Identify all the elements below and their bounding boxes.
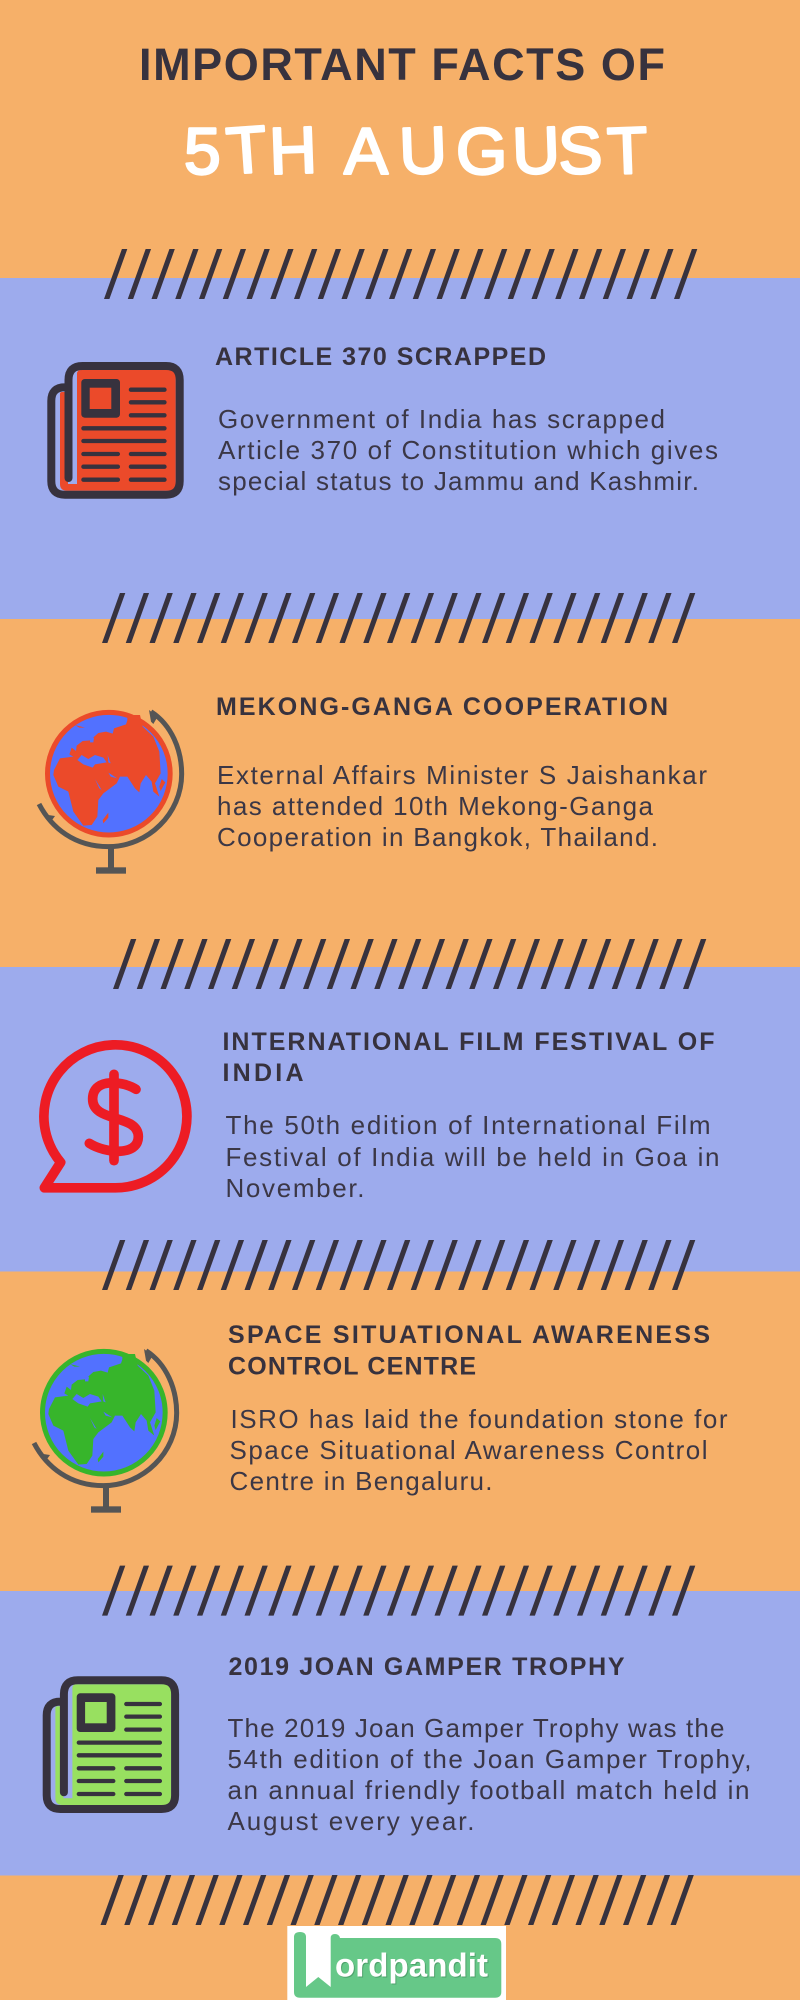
logo text: ordpandit [335, 1947, 488, 1984]
panel: article 370 [0, 278, 800, 619]
heading: 2019 JOAN GAMPER TROPHY [228, 1653, 625, 1681]
heading [228, 1321, 710, 1380]
body text: Government of India has scrapped [218, 404, 665, 434]
body text [226, 1110, 720, 1203]
body text: has attended 10th Mekong-Ganga [217, 791, 654, 821]
heading: SPACE SITUATIONAL AWARENESS [228, 1321, 710, 1349]
logo: wordpandit [287, 1926, 506, 2000]
body text: Centre in Bengaluru. [230, 1466, 492, 1496]
body text: ISRO has laid the foundation stone for [230, 1404, 728, 1434]
body text: The 2019 Joan Gamper Trophy was the [228, 1713, 724, 1743]
panel: film festival [0, 967, 800, 1272]
body text: Festival of India will be held in Goa in [226, 1142, 720, 1172]
icon: globe with green land [34, 1349, 177, 1513]
icon: dollar speech bubble [44, 1045, 187, 1188]
body text [218, 404, 718, 496]
heading: MEKONG-GANGA COOPERATION [216, 693, 668, 721]
body text: Space Situational Awareness Control [230, 1435, 708, 1465]
body text: special status to Jammu and Kashmir. [218, 466, 699, 496]
header [139, 39, 665, 188]
body text [230, 1404, 728, 1496]
icon: globe with red land [39, 710, 182, 874]
body text: November. [226, 1173, 364, 1203]
heading: CONTROL CENTRE [228, 1352, 476, 1380]
panel: space situational awareness [0, 1272, 800, 1591]
body text: 54th edition of the Joan Gamper Trophy, [228, 1744, 752, 1774]
body text: an annual friendly football match held in [228, 1775, 750, 1805]
heading: INTERNATIONAL FILM FESTIVAL OF [222, 1028, 714, 1056]
body text [217, 760, 707, 852]
body text: External Affairs Minister S Jaishankar [217, 760, 707, 790]
body text: August every year. [228, 1806, 474, 1836]
icon: green newspaper [47, 1680, 175, 1809]
title: date: 5TH AUGUST [184, 111, 649, 188]
body text: Article 370 of Constitution which gives [218, 435, 718, 465]
icon: red newspaper [51, 366, 180, 495]
body text: The 50th edition of International Film [226, 1110, 710, 1140]
title: important facts of: IMPORTANT FACTS OF [139, 39, 665, 90]
panel: joan gamper trophy [0, 1591, 800, 1876]
heading: ARTICLE 370 SCRAPPED [215, 343, 546, 371]
heading: INDIA [222, 1059, 304, 1087]
body text [228, 1713, 752, 1836]
body text: Cooperation in Bangkok, Thailand. [217, 822, 658, 852]
panel: mekong-ganga [0, 619, 800, 967]
heading [222, 1028, 714, 1087]
